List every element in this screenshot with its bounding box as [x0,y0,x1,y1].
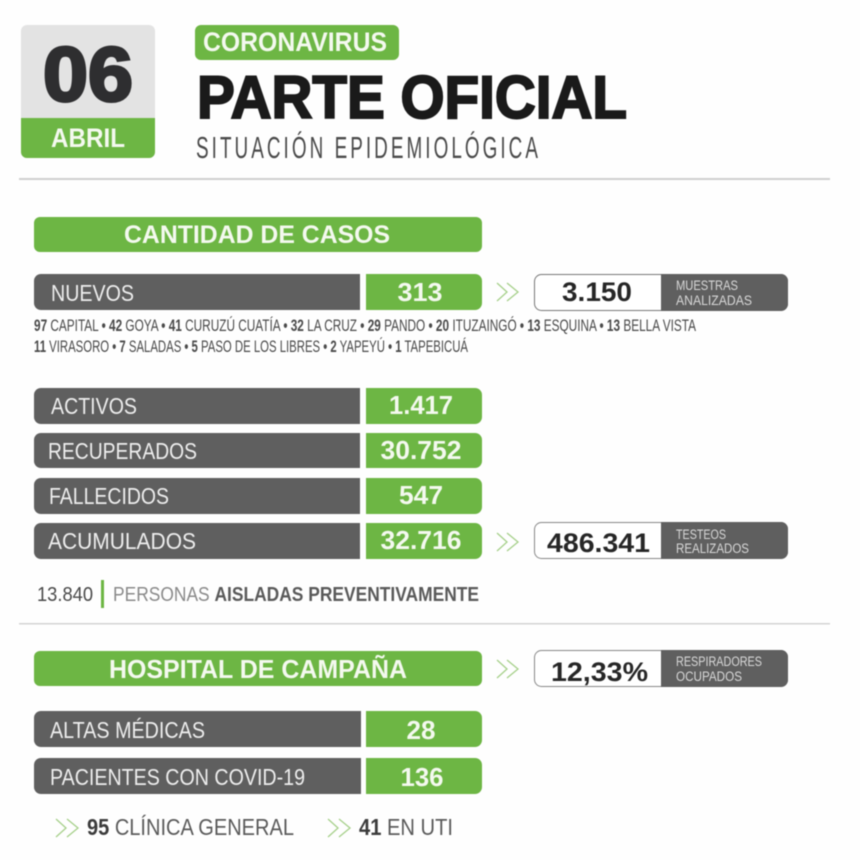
heading: hospital de campaña [34,651,482,686]
row: activos: 1.417 [389,390,453,420]
row: acumulados: 32.716 [380,525,462,555]
row: pacientes con covid-19: 136 [400,762,444,792]
row: fallecidos: FALLECIDOS [49,483,169,509]
arrow [497,533,518,551]
row: recuperados [34,433,482,468]
coronavirus badge: CORONAVIRUS [203,27,387,57]
callout: respiradores ocupados: OCUPADOS [676,669,742,684]
heading: cantidad de casos: CANTIDAD DE CASOS [124,221,390,249]
callout: muestras analizadas: ANALIZADAS [676,293,752,308]
arrow [497,660,518,678]
callout: testeos realizados [534,522,788,559]
text: personas aisladas [37,580,479,608]
date block [21,25,155,158]
text: cases by locality [34,316,696,356]
heading: hospital de campaña: HOSPITAL DE CAMPAÑA [109,654,407,684]
arrow [56,819,78,837]
callout: testeos realizados: TESTEOS [676,527,726,542]
row: nuevos [34,274,482,310]
subtitle: SITUACIÓN EPIDEMIOLÓGICA [196,130,541,165]
row: altas médicas: ALTAS MÉDICAS [50,717,205,743]
callout: testeos realizados: 486.341 [547,528,650,558]
text: cases by locality: 11 VIRASORO • 7 SALADAS • 5 PASO DE LOS LIBRES • 2 YAPEYÚ • 1 TAPEBICUÁ [34,337,468,356]
callout: muestras analizadas [534,274,788,311]
callout: testeos realizados: REALIZADOS [676,541,749,556]
row: nuevos: 313 [398,277,442,307]
row: activos [34,388,482,424]
callout: respiradores ocupados: 12,33% [551,657,648,687]
callout: muestras analizadas: MUESTRAS [676,278,738,293]
row: nuevos: NUEVOS [51,280,134,306]
text: personas aisladas: 13.840 [37,584,93,606]
text: en uti: 41 EN UTI [359,814,453,840]
callout: respiradores ocupados: RESPIRADORES [676,654,762,669]
title: PARTE OFICIAL [197,64,627,131]
arrow [328,819,350,837]
row: acumulados: ACUMULADOS [48,528,196,554]
callout: respiradores ocupados [534,650,788,687]
row: pacientes con covid-19: PACIENTES CON COVID-19 [50,764,305,790]
arrow [497,283,518,301]
row: fallecidos: 547 [399,480,443,510]
row: fallecidos [34,478,482,514]
row: recuperados: RECUPERADOS [48,438,197,464]
text: cases by locality: 97 CAPITAL • 42 GOYA • 41 CURUZÚ CUATÍA • 32 LA CRUZ • 29 PANDO • 20 ITUZAINGÓ • 13 ESQUINA • 13 BELLA VISTA [34,316,696,335]
text: personas aisladas: PERSONAS AISLADAS PREVENTIVAMENTE [113,583,479,606]
heading: cantidad de casos [34,217,482,252]
date block: ABRIL [51,123,125,153]
row: altas médicas [34,711,482,747]
row: altas médicas: 28 [406,715,436,745]
date block: 06 [43,32,133,118]
row: pacientes con covid-19 [34,758,482,794]
row: acumulados [34,523,482,559]
text: clínica general: 95 CLÍNICA GENERAL [87,814,294,840]
row: recuperados: 30.752 [380,435,462,465]
row: activos: ACTIVOS [51,393,137,419]
callout: muestras analizadas: 3.150 [562,277,632,307]
